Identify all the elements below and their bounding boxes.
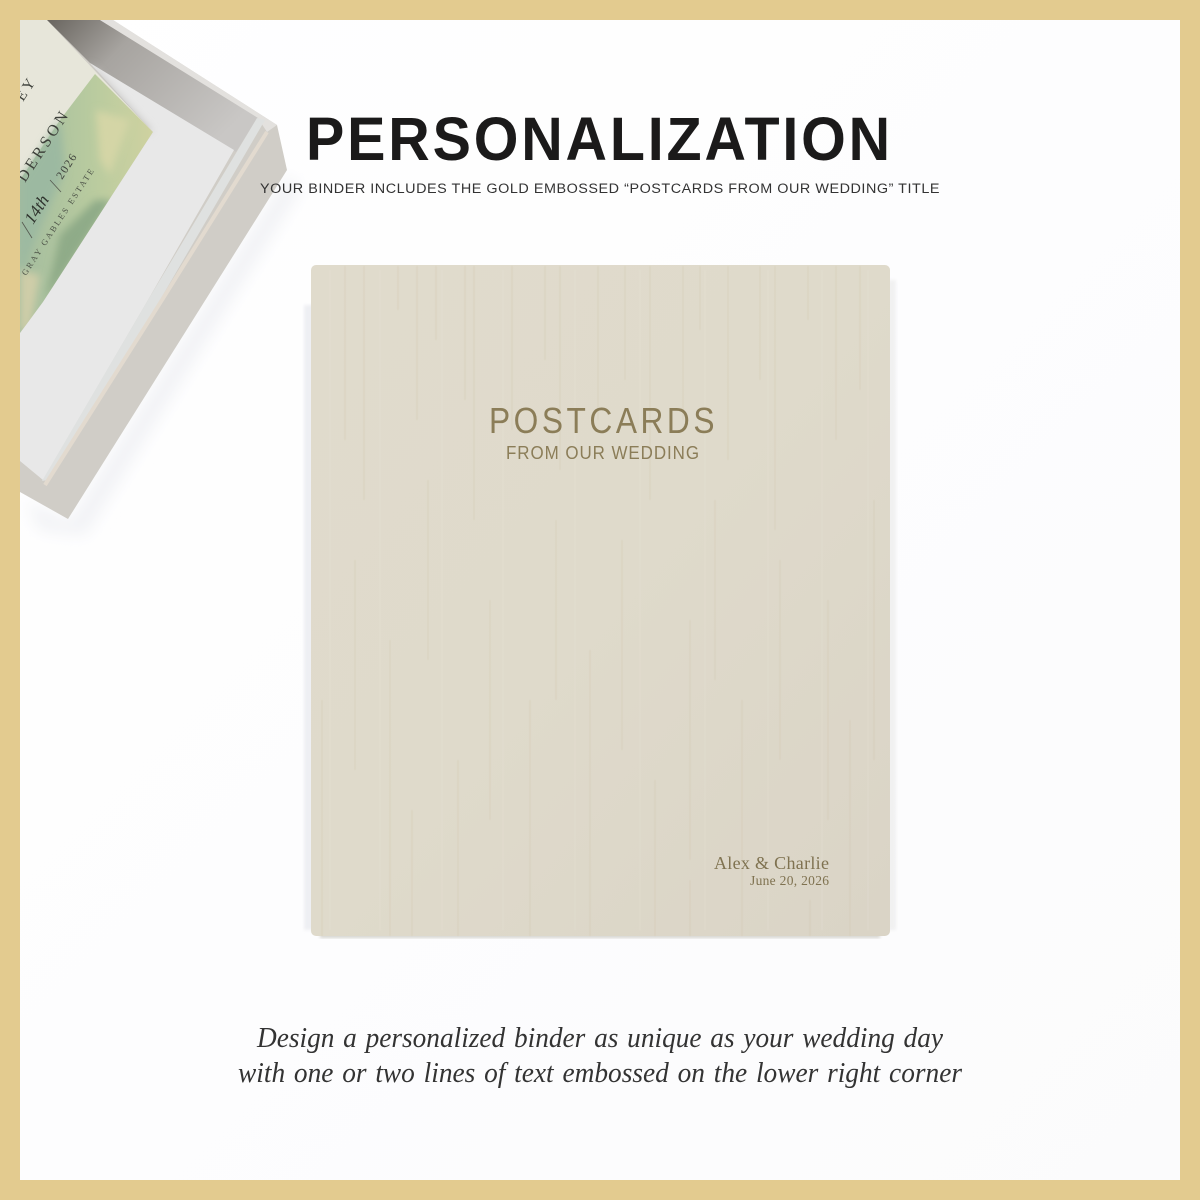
binder date: June 20, 2026	[750, 873, 829, 888]
subheading: YOUR BINDER INCLUDES THE GOLD EMBOSSED “POSTCARDS FROM OUR WEDDING” TITLE	[260, 181, 940, 196]
binder cover	[311, 265, 890, 936]
invitation card: 2026	[54, 151, 80, 182]
description: with one or two lines of text embossed on the lower right corner	[238, 1058, 962, 1089]
binder names: Alex & Charlie	[714, 853, 829, 873]
invitation date: 14th	[20, 191, 53, 227]
box rim top edge	[100, 20, 277, 132]
binder subtitle: FROM OUR WEDDING	[506, 443, 700, 463]
box inner wall	[47, 20, 258, 152]
box shadow	[25, 175, 300, 535]
box outer side	[20, 20, 287, 519]
description	[238, 1023, 962, 1089]
invitation names: EY	[13, 74, 41, 104]
invitation card	[13, 20, 153, 333]
watercolor landscape	[20, 74, 153, 333]
invitation card: DERSON	[14, 106, 74, 185]
inner rim strip	[42, 118, 265, 481]
gift box	[13, 20, 300, 535]
tissue paper floor	[20, 63, 234, 480]
invitation venue: GRAY GABLES ESTATE	[19, 167, 96, 277]
binder shadow	[304, 280, 896, 938]
heading: PERSONALIZATION	[306, 105, 893, 173]
binder title: POSTCARDS	[489, 400, 718, 441]
silk texture	[322, 266, 874, 936]
seam	[45, 132, 267, 485]
description: Design a personalized binder as unique as your wedding day	[256, 1023, 944, 1054]
